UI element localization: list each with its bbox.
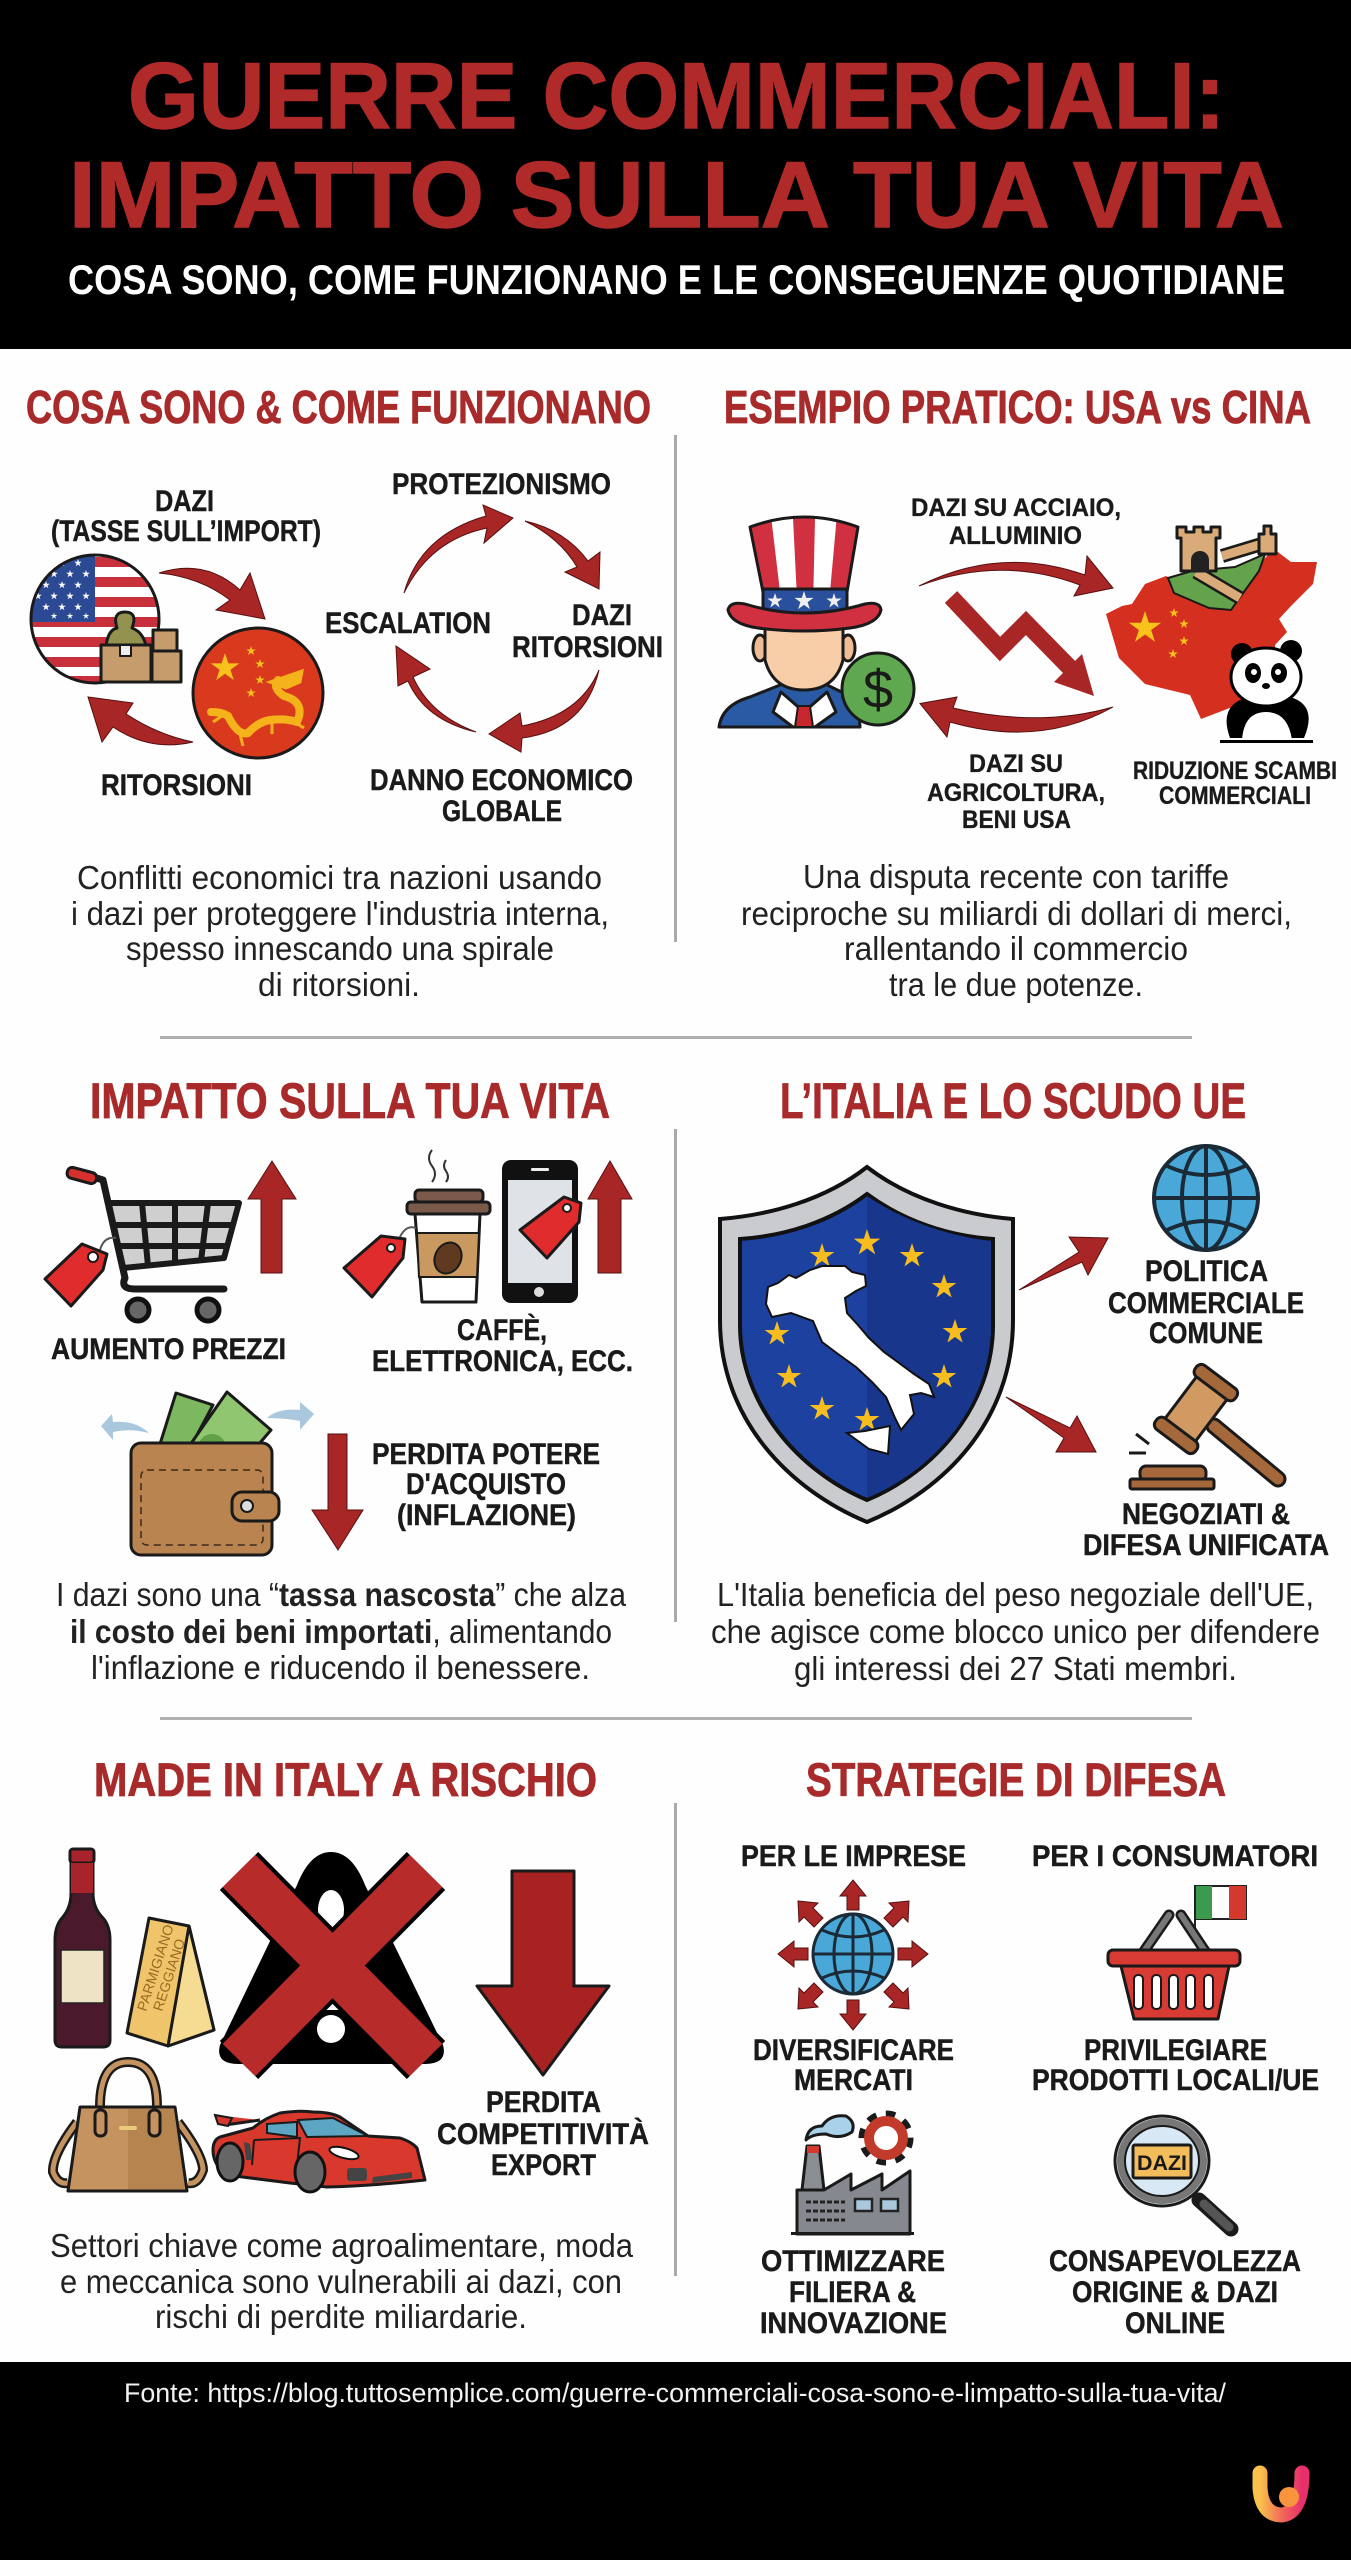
panel: italia e scudo ue — [711, 1073, 1329, 1687]
text block: i dazi per proteggere l'industria interna, — [71, 895, 609, 932]
label: dazi su agricoltura — [927, 750, 1105, 834]
source line: Fonte: https://blog.tuttosemplice.com/guerre-commerciali-cosa-sono-e-limpatto-sulla-tua-vita/ — [124, 2378, 1226, 2408]
text block: gli interessi dei 27 Stati membri. — [794, 1650, 1237, 1687]
label: negoziati difesa — [1083, 1498, 1329, 1562]
label: riduzione scambi — [1133, 757, 1337, 810]
text block: Una disputa recente con tariffe — [803, 858, 1229, 895]
label: ottimizzare: OTTIMIZZARE — [761, 2245, 945, 2278]
text block: I dazi sono una “tassa nascosta” che alza — [56, 1576, 627, 1613]
label: consapevolezza: ONLINE — [1125, 2307, 1225, 2340]
text block: Conflitti economici tra nazioni usando — [77, 859, 602, 896]
label: perdita potere: D'ACQUISTO — [406, 1468, 566, 1501]
title: IMPATTO SULLA TUA VITA — [69, 142, 1284, 247]
arrow: cycle bottom left — [396, 646, 476, 732]
icon: basket with italian flag — [1108, 1886, 1246, 2019]
icon: handbag — [53, 2062, 203, 2191]
text block: Settori chiave come agroalimentare, moda — [50, 2227, 634, 2264]
arrow: purchasing power down — [312, 1434, 363, 1550]
label: ritorsioni: RITORSIONI — [101, 769, 252, 802]
label: dazi: DAZI — [155, 485, 214, 518]
label: politica commerciale comune: COMMERCIALE — [1108, 1287, 1304, 1320]
label: caffe elettronica: ELETTRONICA, ECC. — [372, 1345, 633, 1378]
label: danno economico — [370, 764, 633, 828]
label: escalation: ESCALATION — [325, 607, 491, 640]
column heading: imprese: PER LE IMPRESE — [741, 1840, 966, 1873]
title — [69, 43, 1284, 247]
label: dazi: (TASSE SULL’IMPORT) — [51, 515, 321, 548]
icon: logo — [1260, 2473, 1302, 2515]
label: caffe elettronica: CAFFÈ, — [457, 1313, 547, 1347]
label: diversificare mercati: MERCATI — [794, 2064, 913, 2097]
arrow: prices up — [248, 1161, 296, 1273]
label: dazi ritorsioni — [512, 599, 663, 664]
label: dazi su agricoltura: BENI USA — [962, 806, 1071, 834]
text block — [56, 1576, 627, 1686]
icon: wallet with money — [101, 1392, 314, 1555]
label: perdita potere: PERDITA POTERE — [372, 1438, 600, 1471]
arrow: to politica commerciale — [1019, 1237, 1108, 1290]
panel: made in italy a rischio — [50, 1753, 649, 2335]
text block: di ritorsioni. — [258, 966, 420, 1003]
arrow: ritorsioni — [88, 697, 193, 745]
icon: factory with gear — [791, 2115, 914, 2235]
arrow: cycle bottom right — [489, 670, 599, 752]
label: ottimizzare: INNOVAZIONE — [760, 2307, 947, 2340]
label: politica commerciale comune: COMUNE — [1149, 1317, 1263, 1350]
icon: sports car — [213, 2111, 425, 2192]
icon: globe with outward arrows — [778, 1880, 928, 2030]
icon: warning triangle crossed — [219, 1852, 444, 2064]
label: politica commerciale comune: POLITICA — [1145, 1255, 1268, 1288]
text block: spesso innescando una spirale — [126, 930, 554, 967]
label: politica commerciale comune — [1108, 1255, 1304, 1350]
arrow: cycle top right — [525, 521, 600, 589]
label: privilegiare: PRIVILEGIARE — [1084, 2034, 1267, 2067]
arrow: big down — [477, 1871, 609, 2075]
label: perdita competitivita export: EXPORT — [491, 2149, 596, 2182]
label: privilegiare — [1032, 2034, 1319, 2097]
icon: parmesan — [127, 1918, 214, 2046]
label: consapevolezza: ORIGINE & DAZI — [1072, 2276, 1278, 2309]
label: diversificare mercati: DIVERSIFICARE — [753, 2034, 954, 2067]
label: danno economico: GLOBALE — [442, 795, 562, 828]
arrow: cycle top left — [404, 505, 513, 593]
heading: STRATEGIE DI DIFESA — [806, 1753, 1226, 1806]
text block: rischi di perdite miliardarie. — [155, 2298, 527, 2335]
heading: MADE IN ITALY A RISCHIO — [94, 1753, 597, 1806]
icon: dollar coin: $ — [863, 660, 893, 720]
icon: globe — [1154, 1146, 1258, 1250]
text block: L'Italia beneficia del peso negoziale dell'UE, — [717, 1576, 1314, 1613]
label: diversificare mercati — [753, 2034, 954, 2097]
icon: smartphone — [502, 1160, 581, 1303]
icon: magnifier with dazi sign — [1115, 2116, 1231, 2229]
label: dazi su acciaio: DAZI SU ACCIAIO, — [911, 494, 1121, 522]
label: ottimizzare: FILIERA & — [789, 2276, 916, 2309]
icon: eu shield with italy — [720, 1167, 1013, 1522]
text block — [50, 2227, 634, 2335]
label: perdita potere — [372, 1438, 600, 1532]
text block: reciproche su miliardi di dollari di merci, — [741, 895, 1292, 932]
label: perdita competitivita export: COMPETITIVITÀ — [437, 2117, 649, 2151]
label: negoziati difesa: DIFESA UNIFICATA — [1083, 1529, 1329, 1562]
footer band — [0, 2362, 1351, 2560]
arrow: decline zigzag — [951, 597, 1094, 696]
arrow: to negoziati — [1006, 1397, 1096, 1452]
heading: IMPATTO SULLA TUA VITA — [90, 1073, 610, 1129]
label: dazi su acciaio: ALLUMINIO — [949, 522, 1082, 550]
label: dazi ritorsioni: DAZI — [572, 599, 632, 632]
text block: l'inflazione e riducendo il benessere. — [91, 1649, 590, 1686]
text block: tra le due potenze. — [889, 966, 1143, 1003]
title: GUERRE COMMERCIALI: — [128, 43, 1225, 148]
label: consapevolezza: CONSAPEVOLEZZA — [1049, 2245, 1301, 2278]
icon: boxes — [101, 612, 181, 682]
label: dazi su agricoltura: DAZI SU — [969, 750, 1063, 778]
icon: parmesan: PARMIGIANO — [134, 1922, 177, 2013]
text block: rallentando il commercio — [844, 930, 1188, 967]
icon: uncle sam — [719, 517, 881, 727]
text block — [741, 858, 1292, 1003]
label: protezionismo: PROTEZIONISMO — [392, 468, 611, 501]
icon: panda — [1220, 640, 1313, 743]
icon: coffee cup — [344, 1150, 490, 1302]
icon: china flag with dragon — [193, 628, 323, 758]
arrow: dazi — [159, 568, 265, 619]
header band — [0, 0, 1351, 349]
text block: e meccanica sono vulnerabili ai dazi, con — [60, 2263, 622, 2300]
icon: wine bottle — [55, 1849, 110, 2047]
arrow: to china — [919, 556, 1113, 596]
label: ottimizzare — [760, 2245, 947, 2340]
arrow: to usa — [920, 697, 1113, 737]
column heading: consumatori: PER I CONSUMATORI — [1032, 1840, 1318, 1873]
label: consapevolezza — [1049, 2245, 1301, 2340]
icon: gavel — [1129, 1362, 1278, 1489]
icon: usa flag — [31, 555, 159, 683]
icon: dollar coin — [842, 653, 914, 725]
icon: magnifier with dazi sign: DAZI — [1137, 2152, 1187, 2175]
text block: il costo dei beni importati, alimentando — [70, 1613, 612, 1650]
icon: china map with great wall — [1106, 526, 1317, 719]
label: dazi ritorsioni: RITORSIONI — [512, 631, 663, 664]
icon: parmesan: REGGIANO — [150, 1937, 188, 2013]
label: dazi — [51, 485, 321, 548]
label: dazi su agricoltura: AGRICOLTURA, — [927, 779, 1105, 807]
label: negoziati difesa: NEGOZIATI & — [1122, 1498, 1290, 1531]
label: privilegiare: PRODOTTI LOCALI/UE — [1032, 2064, 1319, 2097]
arrow: electronics up — [588, 1161, 632, 1273]
label: caffe elettronica — [372, 1313, 633, 1378]
label: danno economico: DANNO ECONOMICO — [370, 764, 633, 797]
text block — [71, 859, 609, 1003]
label: perdita competitivita export: PERDITA — [486, 2086, 601, 2119]
cycle diagram — [325, 468, 663, 828]
panel: strategie di difesa — [741, 1753, 1319, 2340]
panel: cosa sono e come funzionano — [26, 381, 663, 1003]
heading: COSA SONO & COME FUNZIONANO — [26, 381, 651, 433]
label: perdita competitivita export — [437, 2086, 649, 2182]
label: dazi su acciaio — [911, 494, 1121, 550]
label: perdita potere: (INFLAZIONE) — [397, 1499, 576, 1532]
panel: esempio pratico usa vs cina — [719, 381, 1337, 1003]
label: riduzione scambi: COMMERCIALI — [1159, 782, 1311, 810]
label: aumento prezzi: AUMENTO PREZZI — [51, 1333, 286, 1366]
icon: shopping cart with tag — [45, 1166, 239, 1321]
text block: che agisce come blocco unico per difendere — [711, 1613, 1320, 1650]
text block — [711, 1576, 1320, 1687]
panel: impatto sulla tua vita — [45, 1073, 633, 1686]
